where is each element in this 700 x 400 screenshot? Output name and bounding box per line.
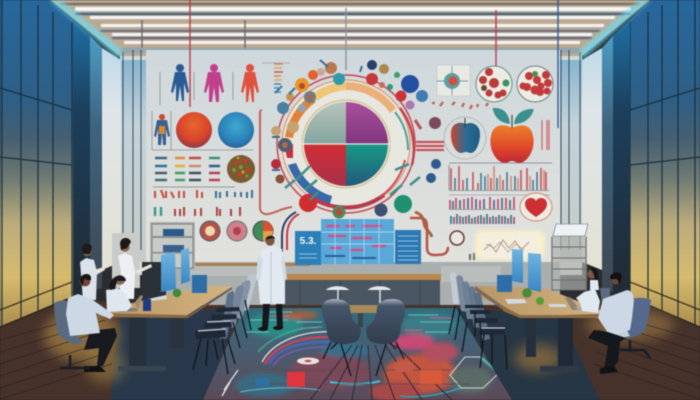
right table chairs (449, 272, 507, 369)
monitor 1 (161, 252, 176, 292)
small legend bars left (155, 158, 220, 180)
side table (344, 305, 380, 327)
right table scientists (576, 267, 651, 374)
screen: 5.3: 5.3. (300, 236, 317, 247)
monitor 1 (512, 249, 523, 283)
seated woman right (576, 267, 610, 313)
standing scientist (256, 236, 287, 331)
small apple (444, 117, 486, 159)
orange sphere (176, 112, 212, 148)
colourful floor pattern (200, 305, 520, 400)
blue cup (143, 299, 151, 311)
keyboards (505, 299, 567, 307)
left table chairs (193, 274, 256, 374)
wood floor (0, 298, 700, 400)
round plates on wall (200, 221, 273, 241)
fruit plate 1 (476, 66, 512, 102)
right table monitors and items (497, 249, 600, 311)
left table (98, 286, 232, 371)
figure: multicolour (154, 114, 170, 145)
bar chart middle (449, 195, 550, 210)
right wall panels (560, 0, 700, 327)
colored dots around circle (271, 60, 441, 218)
lamp right (368, 286, 391, 305)
pictogram rows left (153, 187, 252, 216)
bar chart top (449, 163, 552, 190)
pipe lines (260, 110, 448, 255)
screen: large dashboard (321, 219, 394, 264)
binder (497, 275, 512, 292)
screens on wall (295, 219, 421, 265)
salad bowl (227, 155, 255, 183)
circle quadrant: purple (346, 102, 388, 144)
monitor 2 (528, 253, 541, 292)
figure: red (241, 64, 259, 102)
left wall panels (0, 0, 146, 327)
screen: table (395, 230, 421, 264)
wall background (146, 50, 560, 265)
lounge chair right (366, 299, 405, 376)
chair right (619, 298, 651, 338)
lounge chair left (322, 299, 361, 376)
seated man chair (54, 300, 87, 344)
lab gauge on wall (450, 231, 474, 260)
hanging rods (142, 0, 558, 128)
shelving unit right (551, 224, 588, 292)
laptop (116, 295, 143, 312)
shelves left (112, 222, 195, 300)
binder (192, 275, 207, 293)
fruit plate 2 (517, 66, 553, 102)
monitor 2 (181, 248, 190, 284)
plant (173, 289, 181, 297)
large apple with leaves (490, 108, 534, 163)
circle quadrant: teal (346, 144, 388, 186)
circle quadrant: red (304, 144, 346, 186)
top bar group right of circle (415, 102, 488, 150)
seated man (66, 274, 117, 372)
figure: blue (171, 64, 189, 101)
lamp left (326, 286, 349, 305)
glowing whiteboard (476, 231, 544, 259)
centre lounge: table and stools (322, 286, 405, 376)
left table scientists (54, 238, 152, 372)
small chart top left of circle (262, 63, 290, 92)
heart icon (520, 193, 552, 221)
counters and cabinets (146, 262, 560, 308)
network diagram panel (437, 65, 470, 96)
red vertical lines right (542, 120, 549, 150)
blue sphere (218, 112, 254, 148)
scientist standing back right (118, 238, 152, 299)
wall graphics: human figures (152, 64, 259, 150)
left table monitors and items (116, 248, 207, 312)
laptops (565, 297, 600, 311)
circle quadrant: grey teal (304, 102, 346, 144)
ceiling with light strips (50, 0, 650, 56)
right table (475, 286, 610, 372)
seated man right (588, 272, 634, 374)
central circle ring diagram (277, 75, 415, 213)
bar chart bottom (451, 214, 514, 224)
figure: magenta (204, 64, 224, 102)
seated woman (106, 275, 132, 312)
scientist standing back left (80, 244, 105, 300)
keyboard (148, 295, 167, 301)
plants (522, 288, 544, 305)
